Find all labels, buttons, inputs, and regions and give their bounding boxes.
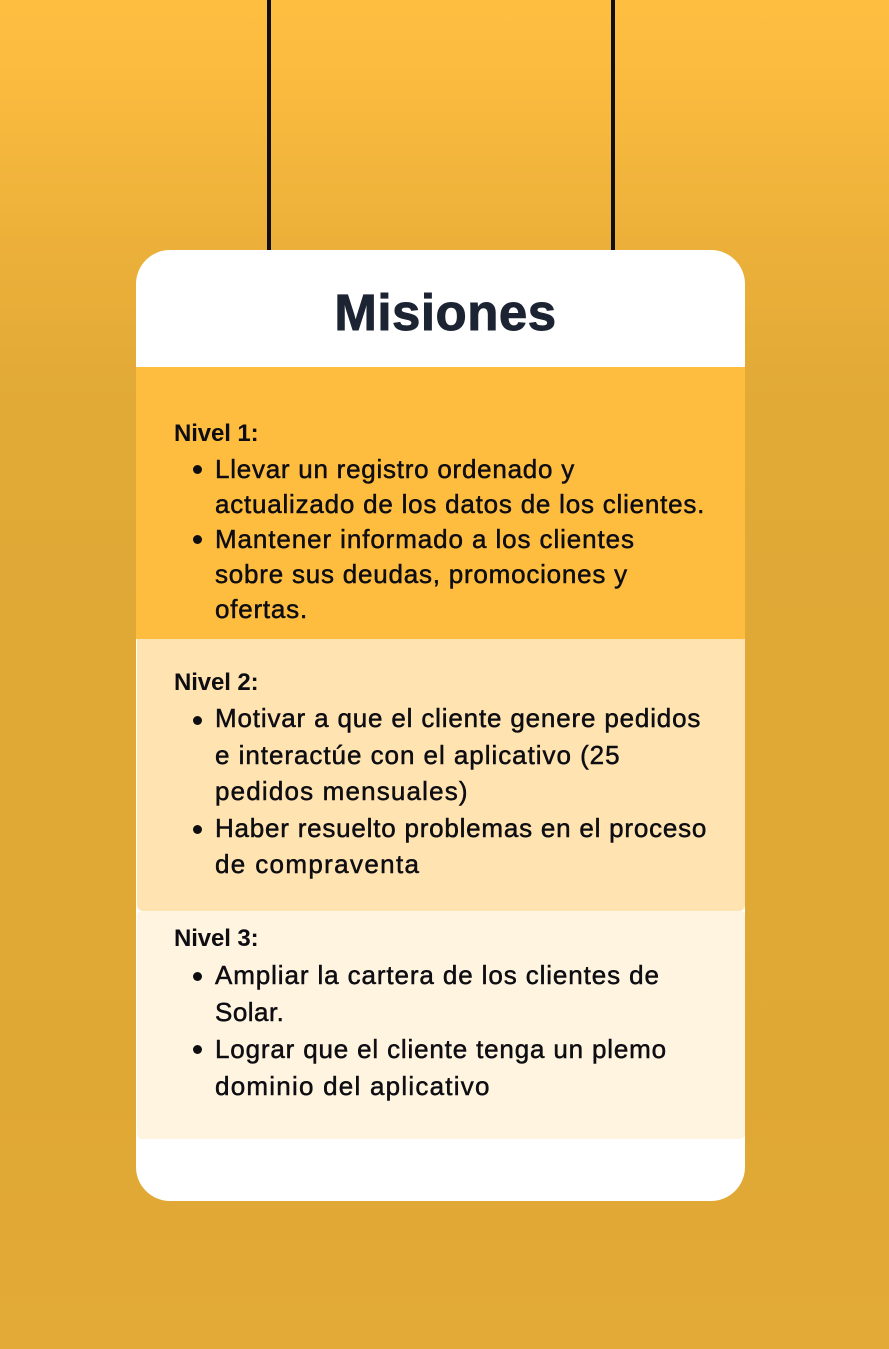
bullet text: portfolio: Solar. bbox=[215, 996, 284, 1026]
bullet marker bbox=[193, 1045, 202, 1054]
left hanging cord bbox=[267, 0, 271, 250]
panel: level 3 bbox=[137, 911, 745, 1139]
bullet text: orders bbox=[215, 703, 701, 806]
bullet text: orders: Motivar a que el cliente genere pedidos bbox=[215, 703, 701, 733]
bullet text: portfolio bbox=[214, 960, 660, 1026]
bullet text: records bbox=[215, 454, 705, 519]
bullet text: orders: e interactúe con el aplicativo (25 bbox=[215, 740, 621, 770]
bullet marker bbox=[193, 825, 202, 834]
panel: level 2 bbox=[137, 639, 745, 911]
bullet text: portfolio: Ampliar la cartera de los clientes de bbox=[215, 960, 660, 990]
bullet text: problems bbox=[215, 813, 707, 879]
panel: level 1 bbox=[136, 367, 745, 639]
heading: level 2: Nivel 2: bbox=[174, 669, 259, 696]
bullet text: inform clients: Mantener informado a los clientes bbox=[215, 524, 635, 554]
right hanging cord bbox=[611, 0, 615, 250]
bullet text: records: Llevar un registro ordenado y bbox=[215, 454, 575, 484]
bullet marker bbox=[193, 465, 202, 474]
bullet text: mastery: dominio del aplicativo bbox=[215, 1071, 491, 1101]
bullet text: orders: pedidos mensuales) bbox=[215, 776, 469, 806]
bullet text: inform clients: ofertas. bbox=[215, 594, 308, 624]
heading: level 1: Nivel 1: bbox=[174, 420, 259, 447]
bullet text: inform clients bbox=[215, 524, 635, 624]
bullet text: mastery: Lograr que el cliente tenga un plemo bbox=[215, 1034, 667, 1064]
bullet text: records: actualizado de los datos de los clientes. bbox=[215, 489, 705, 519]
bullet text: problems: Haber resuelto problemas en el proceso bbox=[215, 813, 707, 843]
bullet marker bbox=[193, 972, 202, 981]
title: Misiones bbox=[334, 284, 557, 341]
bullet text: inform clients: sobre sus deudas, promociones y bbox=[215, 559, 628, 589]
bullet marker bbox=[193, 716, 202, 725]
bullet marker bbox=[193, 535, 202, 544]
bullet text: problems: de compraventa bbox=[215, 849, 420, 879]
panel: missions card bbox=[136, 250, 745, 1201]
heading: level 3: Nivel 3: bbox=[174, 925, 259, 952]
bullet text: mastery bbox=[215, 1034, 667, 1101]
